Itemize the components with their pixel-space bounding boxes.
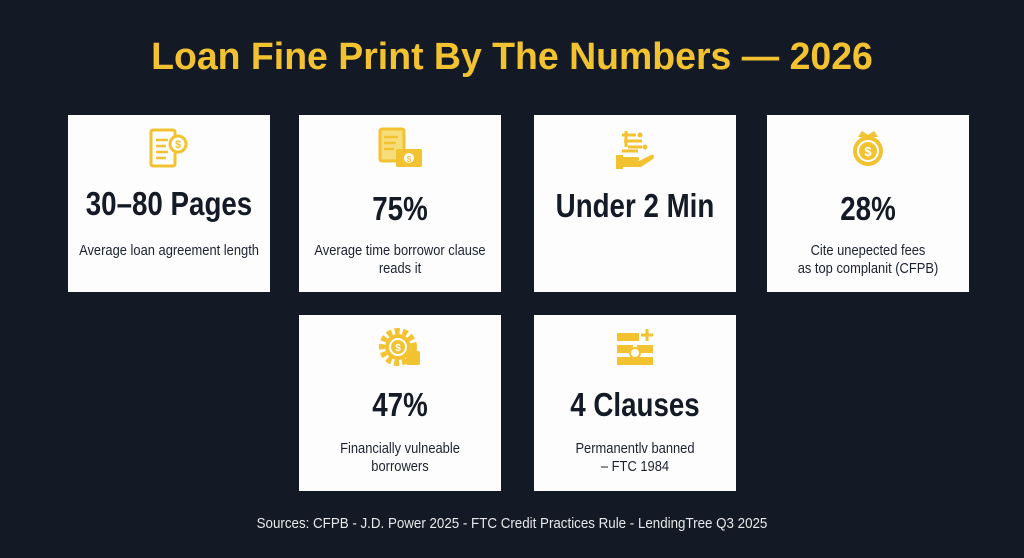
icon: document with bill: $ [407,155,412,164]
number: 75% [372,190,428,227]
icon: document dollar [150,128,188,168]
icon: coin with crown [853,131,883,166]
caption: as top complanit (CFPB) [798,261,938,277]
panel: pages [68,115,270,292]
panel: 4 clauses [534,315,736,491]
icon: gear dollar: $ [395,343,401,354]
caption: Average time borrowor clause [314,243,486,259]
caption: Average loan agreement length [79,243,259,259]
icon: hand with lines [616,131,654,169]
number: 28% [840,190,896,227]
title: Loan Fine Print By The Numbers — 2026 [151,36,873,78]
icon: coin with crown: $ [864,144,872,159]
caption: reads it [379,261,421,277]
icon: gear dollar [379,328,420,366]
caption [575,441,695,475]
panel: 47% [299,315,501,491]
caption: – FTC 1984 [601,459,669,475]
caption [340,441,460,475]
icon: blocks [617,329,653,365]
panel: 28% [767,115,969,292]
caption [798,243,938,277]
caption: borrowers [371,459,429,475]
caption [314,243,486,277]
icon: document with bill [378,128,422,167]
panel: 75% [299,115,501,292]
number: 47% [372,386,428,423]
footer: sources: Sources: CFPB - J.D. Power 2025 - FTC Credit Practices Rule - LendingTree Q3 2025 [257,515,767,532]
panel: under 2 min [534,115,736,292]
number: 30–80 Pages [86,185,252,222]
caption: Financially vulneable [340,441,460,457]
icon: document dollar: $ [175,139,181,151]
number: Under 2 Min [556,187,714,224]
number: 4 Clauses [570,386,700,423]
caption: Cite unepected fees [811,243,925,259]
caption: Permanentlv banned [575,441,695,457]
